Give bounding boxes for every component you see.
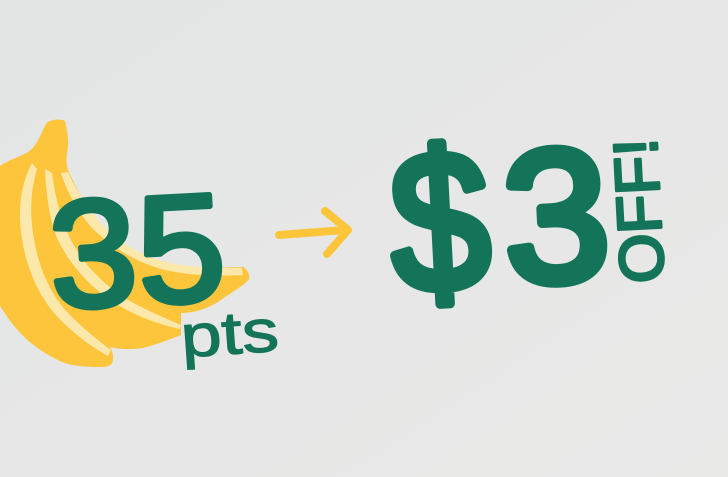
discount label: OFF!: OFF! [601, 136, 678, 285]
banana highlight stripe: left [20, 163, 111, 356]
points unit: pts: pts [178, 297, 281, 370]
banana highlight stripe: middle [45, 169, 181, 329]
icon: banana bunch [0, 120, 249, 367]
banana highlight stripe: right [61, 172, 243, 276]
discount: 3: 3 [498, 108, 614, 324]
points value: 35: 35 [45, 161, 229, 341]
discount: dollar sign: $ [385, 109, 495, 334]
arrow [279, 211, 348, 254]
